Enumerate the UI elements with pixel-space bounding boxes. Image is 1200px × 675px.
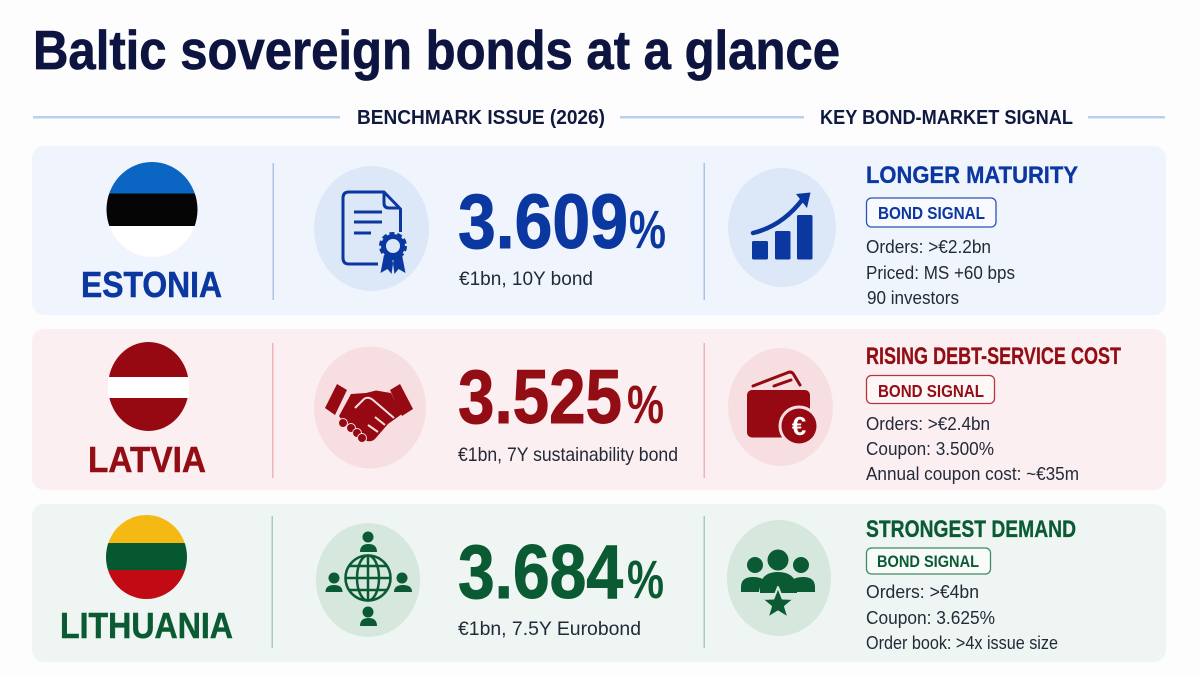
title: Baltic sovereign bonds at a glance xyxy=(33,19,840,81)
signal details: Lithuania: Coupon: 3.625% xyxy=(866,608,995,628)
badge: Latvia xyxy=(866,376,994,404)
badge: Lithuania xyxy=(866,548,990,574)
icon: bond certificate xyxy=(314,166,429,291)
flag: Lithuania xyxy=(106,515,187,599)
yield: Estonia: 3.609 xyxy=(458,179,628,265)
badge: Estonia: BOND SIGNAL xyxy=(878,203,985,223)
icon: handshake xyxy=(314,346,426,468)
country name: Latvia: LATVIA xyxy=(88,439,206,480)
header: key bond-market signal: KEY BOND-MARKET SIGNAL xyxy=(820,107,1073,129)
yield: Latvia: % xyxy=(627,375,664,435)
yield: Estonia: % xyxy=(629,200,666,260)
yield: Lithuania: 3.684 xyxy=(458,530,623,615)
badge: Estonia xyxy=(866,198,996,227)
badge: Latvia: BOND SIGNAL xyxy=(878,381,984,401)
signal details: Lithuania xyxy=(866,582,1058,653)
panel: Estonia xyxy=(32,146,1166,315)
icon: investors with star xyxy=(727,520,831,636)
flag: Latvia xyxy=(108,342,189,431)
signal title: Lithuania: STRONGEST DEMAND xyxy=(866,516,1076,543)
signal details: Latvia: Coupon: 3.500% xyxy=(866,439,994,459)
signal details: Latvia: Annual coupon cost: ~€35m xyxy=(866,464,1079,484)
icon: wallet with euro coin: € xyxy=(792,411,806,441)
signal title: Estonia: LONGER MATURITY xyxy=(866,162,1078,189)
column headers xyxy=(33,107,1165,129)
signal title: Latvia: RISING DEBT-SERVICE COST xyxy=(866,343,1121,370)
signal details: Latvia xyxy=(866,414,1079,484)
signal details: Lithuania: Orders: >€4bn xyxy=(866,582,979,602)
icon: wallet with euro coin xyxy=(728,348,833,466)
flag: Estonia xyxy=(105,160,200,259)
badge: Lithuania: BOND SIGNAL xyxy=(877,552,979,571)
icon: rising bar chart xyxy=(728,168,836,287)
yield: Lithuania: % xyxy=(627,550,664,610)
country name: Estonia: ESTONIA xyxy=(81,264,222,305)
panel: Latvia xyxy=(32,329,1166,490)
issue details: Latvia: €1bn, 7Y sustainability bond xyxy=(458,444,678,466)
yield: Latvia: 3.525 xyxy=(458,355,622,440)
country name: Lithuania: LITHUANIA xyxy=(60,605,233,646)
signal details: Estonia: Priced: MS +60 bps xyxy=(866,263,1015,283)
signal details: Latvia: Orders: >€2.4bn xyxy=(866,414,990,434)
header: benchmark issue: BENCHMARK ISSUE (2026) xyxy=(357,107,605,129)
issue details: Estonia: €1bn, 10Y bond xyxy=(459,268,593,290)
signal details: Lithuania: Order book: >4x issue size xyxy=(866,633,1058,653)
signal details: Estonia: Orders: >€2.2bn xyxy=(866,237,991,257)
issue details: Lithuania: €1bn, 7.5Y Eurobond xyxy=(458,618,641,640)
signal details: Estonia xyxy=(866,237,1015,308)
icon: globe with investors xyxy=(316,523,420,637)
signal details: Estonia: 90 investors xyxy=(867,288,959,308)
panel: Lithuania xyxy=(32,504,1166,662)
